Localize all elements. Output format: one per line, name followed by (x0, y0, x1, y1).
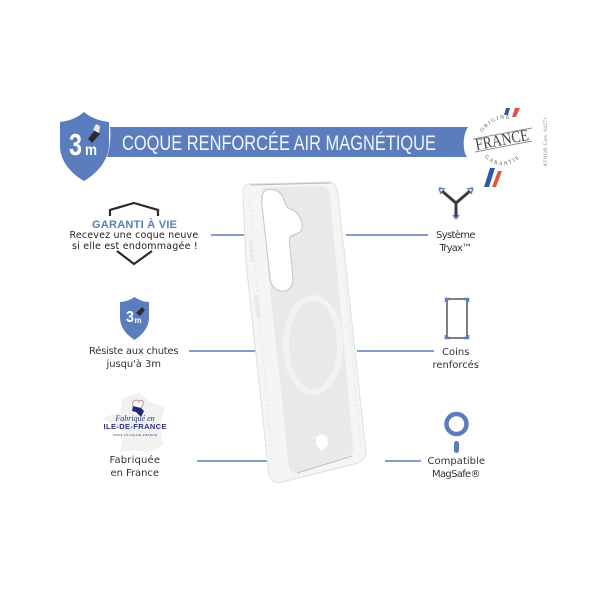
case back panel (262, 186, 353, 473)
icon: 3m shield small: 3 (126, 309, 134, 326)
connector lines (189, 235, 434, 461)
seal word origine: ORIGINE (480, 115, 510, 132)
afnor certification: AFNOR Cert. 94271 (543, 117, 549, 167)
case logo (316, 434, 328, 451)
corners block (432, 299, 480, 371)
warranty heading: GARANTI À VIE (92, 218, 177, 231)
magsafe label: Compatible (428, 456, 486, 467)
warranty block: si elle est endommagée ! (72, 241, 198, 252)
icon: 3m shield small (120, 297, 149, 340)
france guarantee seal (472, 108, 549, 187)
warranty text: Recevez une coque neuve (70, 230, 198, 241)
flag stripes bottom (484, 168, 502, 187)
magsafe block: MagSafe® (432, 469, 481, 480)
drop resistance block: jusqu'à 3m (106, 358, 162, 370)
seal word France: FRANCE (474, 125, 530, 154)
warranty block (70, 203, 198, 264)
france map logo: ILE-DE-FRANCE (104, 422, 166, 431)
case top and bottom edges (250, 183, 352, 473)
icon: 3m shield large: 3 (69, 127, 82, 162)
warranty shield outline (110, 203, 158, 264)
camera cutout (262, 189, 302, 291)
header banner (107, 127, 468, 157)
phone case (243, 182, 366, 483)
france map logo: Fabriqué en (114, 414, 155, 423)
flag stripes top (504, 108, 520, 117)
icon: reinforced corners (446, 299, 468, 338)
icon: 3m shield small: m (134, 316, 142, 325)
magsafe block (428, 414, 486, 480)
corners label: Coins (442, 347, 470, 358)
side buttons (249, 240, 261, 318)
tryax label: Système (436, 229, 476, 241)
corners block: renforcés (432, 359, 480, 371)
made in france block: en France (110, 468, 160, 479)
case bumper texture (250, 200, 361, 460)
made in france label: Fabriquée (110, 454, 160, 466)
magsafe ring (286, 298, 340, 392)
drop resistance block (89, 297, 179, 370)
icon: magsafe (446, 414, 466, 453)
icon: 3m shield large: m (85, 142, 97, 159)
icon: 3m shield large (60, 112, 109, 181)
tryax block: Tryax™ (438, 243, 472, 254)
france map logo: MADE IN ILE-DE-FRANCE (113, 433, 157, 437)
france map logo (102, 393, 166, 452)
tryax block (436, 188, 476, 254)
banner title: COQUE RENFORCÉE AIR MAGNÉTIQUE (122, 132, 436, 155)
made in france block (102, 393, 166, 479)
icon: tryax (439, 188, 473, 219)
drop resistance label: Résiste aux chutes (89, 345, 179, 357)
seal word garantie: GARANTIE (485, 155, 520, 166)
